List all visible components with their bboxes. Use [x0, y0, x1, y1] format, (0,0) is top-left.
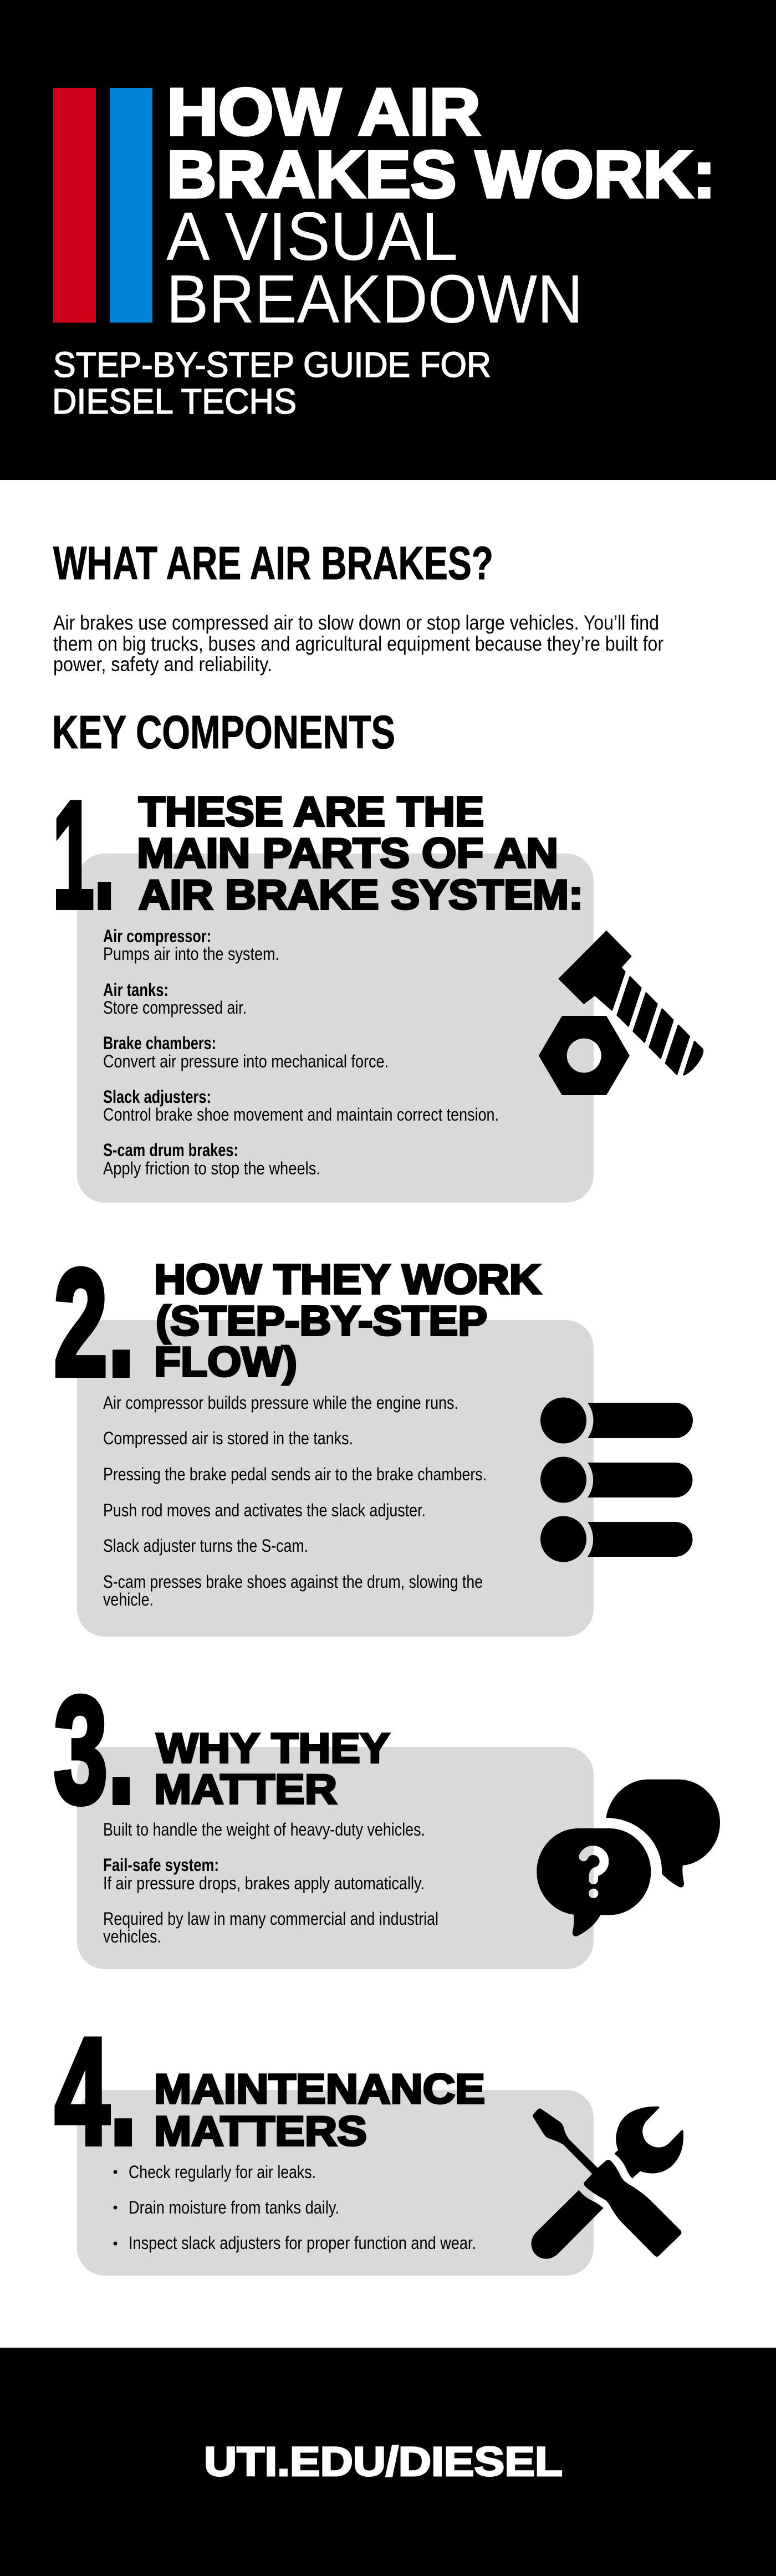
- section 3: why they matter: [54, 1665, 720, 1969]
- card background: [77, 1747, 594, 1969]
- title: BREAKDOWN: [166, 262, 583, 338]
- card background: [77, 2090, 594, 2276]
- section 1: main parts: 1.: [53, 770, 115, 940]
- intro paragraph: [53, 611, 663, 676]
- reasons text: If air pressure drops, brakes apply automatically.: [103, 1873, 425, 1893]
- reasons text: Required by law in many commercial and industrial: [103, 1909, 438, 1929]
- step list: Pressing the brake pedal sends air to the brake chambers.: [103, 1464, 487, 1484]
- icon: list: [540, 1398, 693, 1562]
- parts list: S-cam drum brakes:: [103, 1140, 238, 1160]
- title: HOW AIR: [167, 75, 481, 149]
- step list: S-cam presses brake shoes against the drum, slowing the: [103, 1572, 483, 1592]
- header panel: [0, 0, 776, 480]
- step list: Compressed air is stored in the tanks.: [103, 1428, 353, 1448]
- maintenance checklist: [113, 2162, 476, 2253]
- card background: [77, 1320, 594, 1637]
- section 1 heading: THESE ARE THE: [139, 788, 484, 835]
- reasons text: [103, 1819, 438, 1946]
- subtitle: STEP-BY-STEP GUIDE FOR: [53, 345, 491, 385]
- reasons text: Fail-safe system:: [103, 1855, 219, 1875]
- intro paragraph: them on big trucks, buses and agricultural equipment because they’re built for: [53, 632, 663, 655]
- number 3: 3.: [54, 1665, 135, 1835]
- section 4 heading: [154, 2066, 485, 2154]
- step list: vehicle.: [103, 1589, 154, 1609]
- blue accent bar: [110, 88, 152, 323]
- red accent bar: [53, 88, 96, 323]
- maintenance checklist: Inspect slack adjusters for proper function and wear.: [129, 2233, 476, 2253]
- section 3 heading: [154, 1725, 390, 1812]
- section 1 heading: [137, 788, 583, 918]
- number 4: 4.: [55, 2007, 137, 2176]
- parts list: [103, 926, 499, 1178]
- reasons text: vehicles.: [103, 1926, 161, 1946]
- icon: crossed screwdriver and wrench: [531, 2107, 683, 2259]
- parts list: Store compressed air.: [103, 998, 247, 1018]
- footer panel: [0, 2348, 776, 2576]
- maintenance checklist: Drain moisture from tanks daily.: [129, 2197, 339, 2217]
- title: [166, 75, 716, 338]
- parts list: Convert air pressure into mechanical force.: [103, 1051, 389, 1071]
- parts list: Apply friction to stop the wheels.: [103, 1158, 320, 1178]
- reasons text: Built to handle the weight of heavy-duty vehicles.: [103, 1819, 425, 1839]
- heading: key components: KEY COMPONENTS: [52, 706, 395, 758]
- section 3 heading: MATTER: [154, 1766, 337, 1812]
- footer url: UTI.EDU/DIESEL: [204, 2439, 563, 2485]
- section 1 heading: AIR BRAKE SYSTEM:: [139, 871, 583, 918]
- subtitle: DIESEL TECHS: [52, 381, 297, 421]
- intro paragraph: power, safety and reliability.: [53, 653, 272, 676]
- icon: bolt and nut: [539, 932, 703, 1095]
- title: BRAKES WORK:: [167, 137, 716, 212]
- parts list: Brake chambers:: [103, 1033, 216, 1053]
- section 2 heading: FLOW): [154, 1338, 297, 1385]
- title: A VISUAL: [166, 199, 458, 275]
- number 2: 2.: [54, 1238, 135, 1408]
- parts list: Air tanks:: [103, 980, 169, 1000]
- heading: what are air brakes: WHAT ARE AIR BRAKES?: [53, 537, 493, 589]
- step list: [103, 1393, 487, 1609]
- parts list: Air compressor:: [103, 926, 211, 946]
- section 1: main parts: [53, 770, 703, 1203]
- parts list: Slack adjusters:: [103, 1087, 211, 1107]
- section 4: maintenance matters: [55, 2007, 683, 2276]
- icon: speech bubbles with question mark: [537, 1780, 720, 1936]
- section 3 heading: WHY THEY: [156, 1725, 390, 1771]
- subtitle: [52, 345, 491, 421]
- section 2 heading: HOW THEY WORK: [154, 1256, 541, 1302]
- section 4 heading: MATTERS: [154, 2108, 367, 2154]
- parts list: Pumps air into the system.: [103, 944, 279, 964]
- step list: Air compressor builds pressure while the engine runs.: [103, 1393, 458, 1413]
- section 4 heading: MAINTENANCE: [154, 2066, 485, 2112]
- section 2: how they work: [54, 1238, 693, 1637]
- maintenance checklist: Check regularly for air leaks.: [129, 2162, 316, 2182]
- section 2 heading: [154, 1256, 541, 1385]
- step list: Push rod moves and activates the slack adjuster.: [103, 1500, 426, 1520]
- step list: Slack adjuster turns the S-cam.: [103, 1536, 308, 1556]
- parts list: Control brake shoe movement and maintain correct tension.: [103, 1105, 499, 1125]
- section 1 heading: MAIN PARTS OF AN: [137, 830, 558, 876]
- intro paragraph: Air brakes use compressed air to slow down or stop large vehicles. You’ll find: [53, 611, 659, 634]
- card background: [77, 853, 594, 1203]
- section 2 heading: (STEP-BY-STEP: [156, 1297, 487, 1344]
